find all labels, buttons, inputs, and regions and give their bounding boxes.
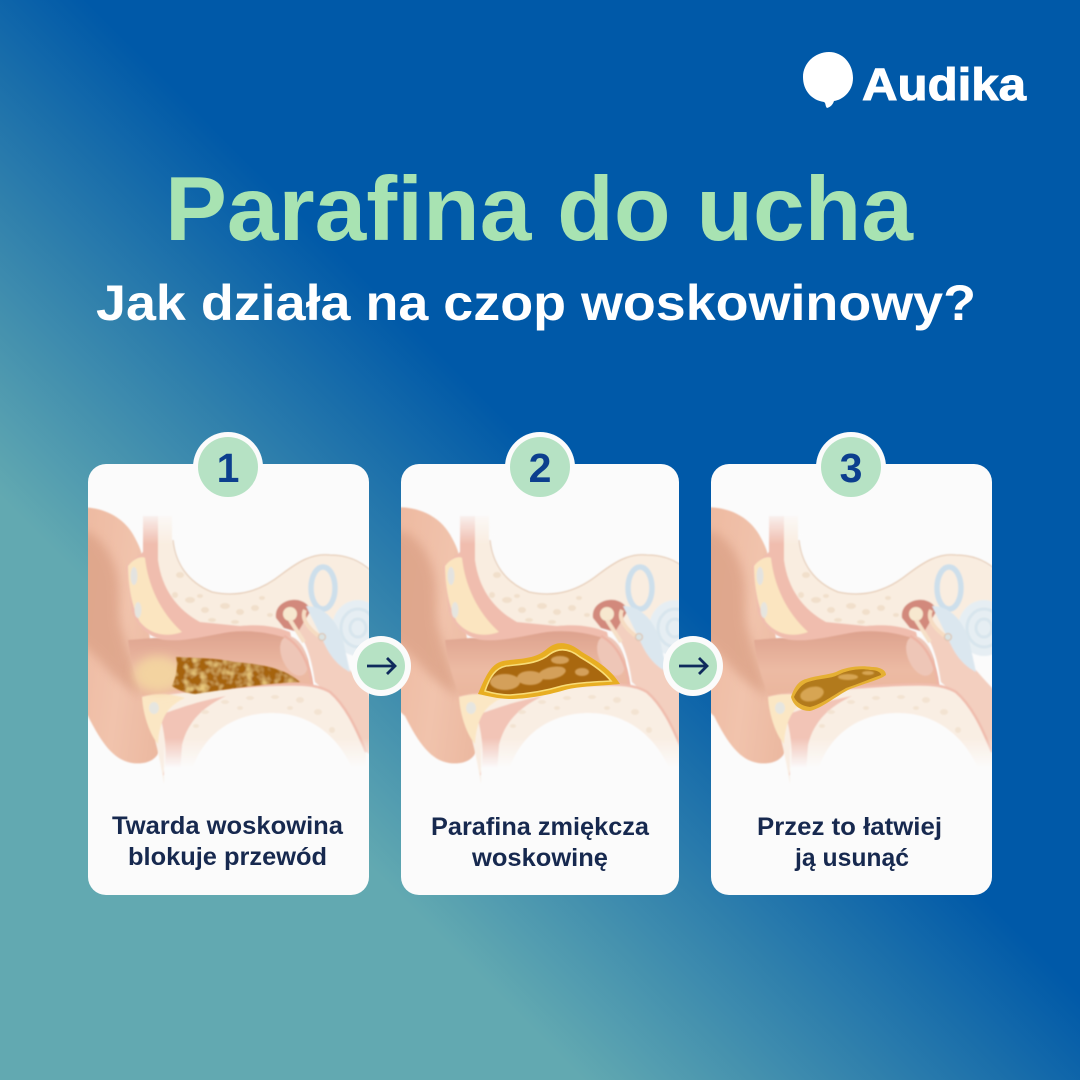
step 1 caption: Twarda woskowina bbox=[112, 812, 344, 840]
badge: number 3 bbox=[816, 432, 886, 502]
step 1 caption: blokuje przewód bbox=[128, 843, 327, 871]
step 3 caption: Przez to łatwiej bbox=[757, 813, 942, 841]
panel: step 1 bbox=[88, 464, 369, 895]
illustration: ear with softened wax bbox=[401, 506, 679, 780]
panel: step 3 bbox=[711, 464, 992, 895]
step 2 caption: woskowinę bbox=[471, 844, 608, 872]
panel: step 2 bbox=[401, 464, 679, 895]
badge: number 1: 1 bbox=[217, 445, 239, 491]
subtitle: Jak działa na czop woskowinowy? bbox=[96, 275, 976, 331]
step 3 caption: ją usunąć bbox=[794, 844, 909, 872]
badge: number 1 bbox=[193, 432, 263, 502]
logo: Audika bbox=[803, 52, 1027, 110]
arrow: step 2 to step 3 bbox=[663, 636, 723, 696]
arrow: step 1 to step 2 bbox=[351, 636, 411, 696]
badge: number 2 bbox=[505, 432, 575, 502]
step 2 caption: Parafina zmiękcza bbox=[431, 813, 650, 841]
illustration: ear with hard wax bbox=[88, 506, 369, 780]
illustration: ear with loosened wax bbox=[711, 506, 992, 780]
logo wordmark: Audika bbox=[862, 59, 1027, 110]
title: Parafina do ucha bbox=[165, 159, 914, 260]
icon: speech bubble bbox=[803, 52, 853, 108]
badge: number 3: 3 bbox=[840, 445, 862, 491]
badge: number 2: 2 bbox=[529, 445, 551, 491]
